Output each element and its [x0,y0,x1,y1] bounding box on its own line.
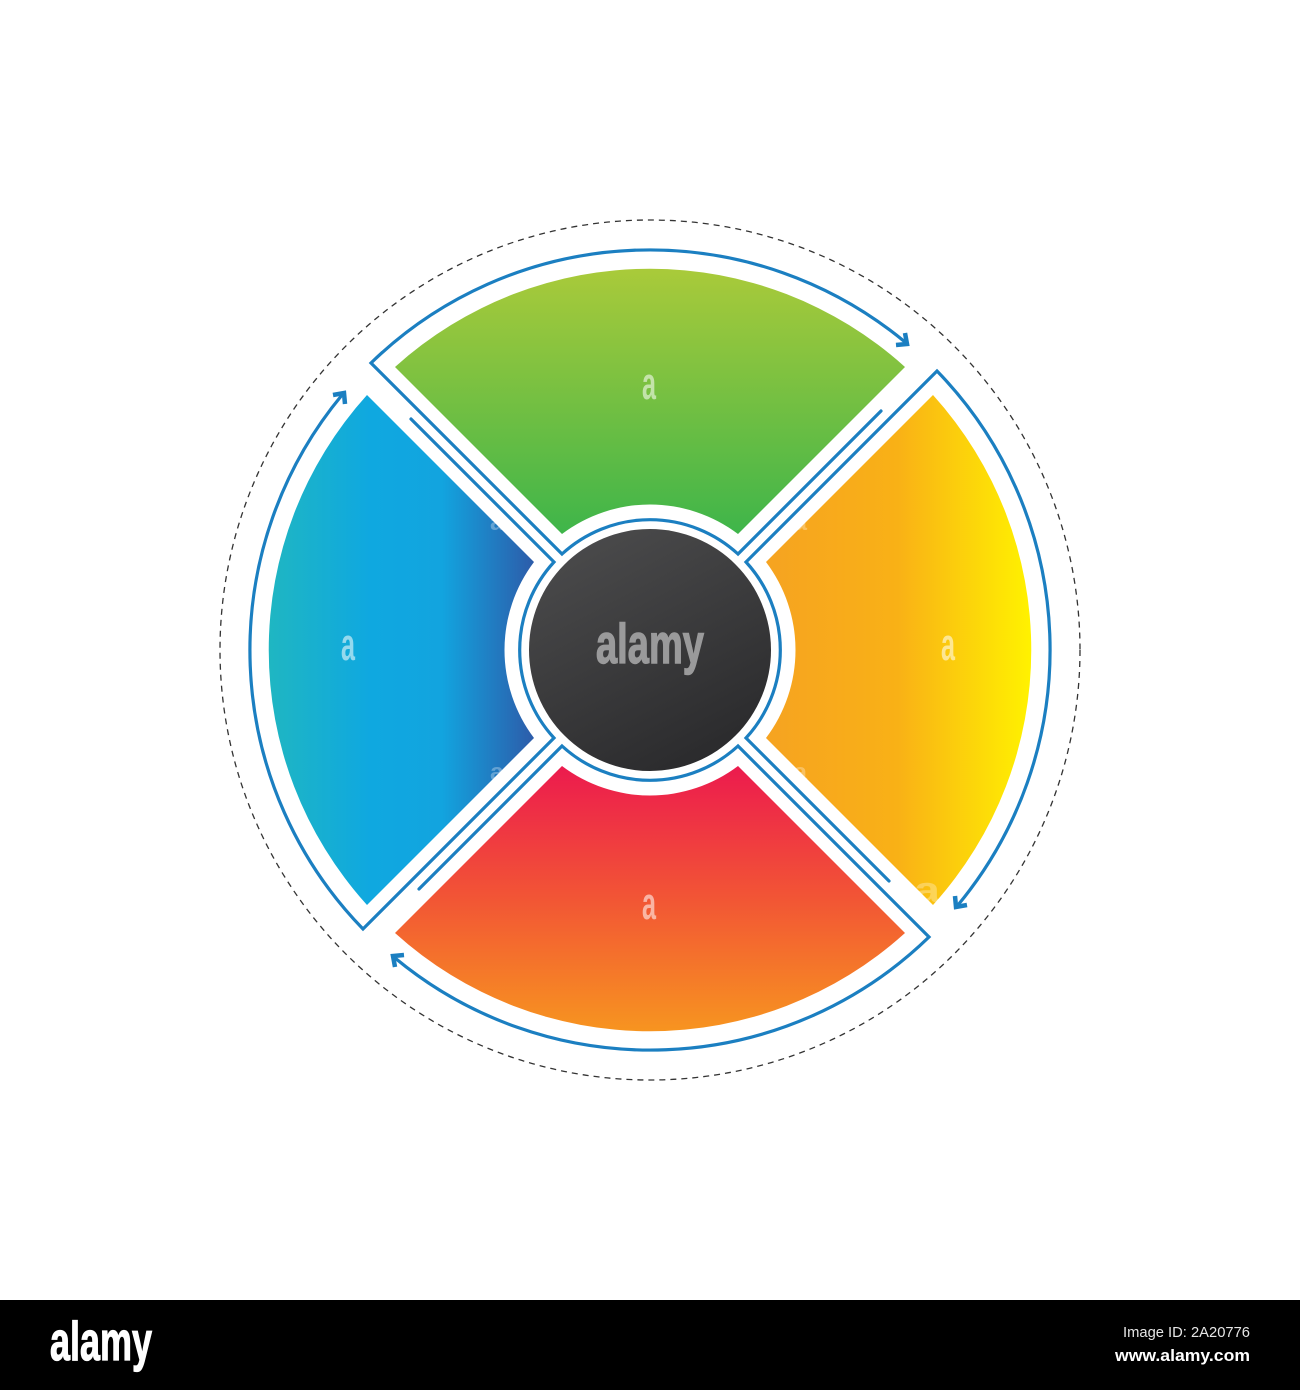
segment: yellow right [766,395,1031,905]
arrow outline: right, clockwise toward bottom [746,371,1050,907]
footer bar [0,1300,1300,1390]
center dark circle [529,529,771,771]
segment: green top [395,269,905,534]
faint watermark letters near segment corners [490,509,941,910]
arrow outline: bottom, clockwise toward left [393,746,929,1050]
segment: blue left [269,395,534,905]
footer url: www.alamy.com [1114,1346,1250,1365]
faint watermark letters near segment corners: a [793,759,808,786]
segment: red bottom [395,766,905,1031]
watermark letters on segments: a [642,878,657,929]
arrow outline: left, clockwise toward top [250,393,554,929]
faint watermark letters near segment corners: a [490,759,505,786]
faint watermark letters near segment corners: a [793,509,808,536]
watermark letters on segments [341,358,956,929]
center watermark text: alamy [596,612,704,675]
footer logo: alamy [50,1310,152,1372]
watermark letters on segments: a [642,358,657,409]
dashed outer ring [220,220,1080,1080]
faint watermark letters near segment corners: a [490,509,505,536]
watermark letters on segments: a [341,619,356,670]
footer image id: Image ID: 2A20776 [1123,1324,1250,1341]
faint watermark letters near segment corners: a [914,869,941,910]
watermark letters on segments: a [941,619,956,670]
arrow outline: top, clockwise toward right [371,250,907,554]
